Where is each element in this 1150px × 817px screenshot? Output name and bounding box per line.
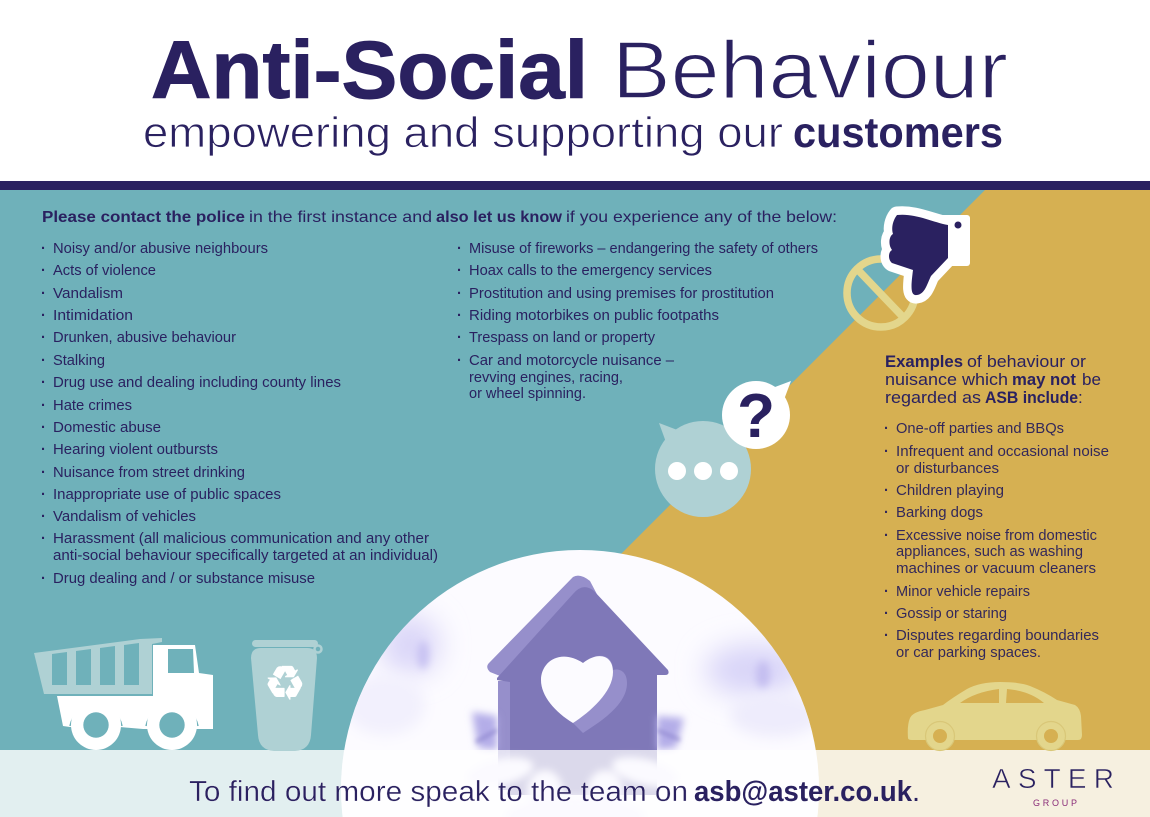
icon: thumbs down [889, 215, 970, 295]
list: ASB behaviours column 1: Hate crimes [53, 398, 132, 414]
list: ASB behaviours column 2: · [457, 286, 462, 302]
icon: speech bubble with dots [655, 421, 751, 517]
icon: recycling bin [251, 640, 322, 751]
list: ASB behaviours column 1: anti-social behaviour specifically targeted at an individual) [53, 548, 438, 564]
list: not ASB heading: may not [1012, 370, 1076, 389]
title: Behaviour [612, 25, 1008, 116]
panel: teal ASB background [0, 190, 1150, 750]
list: not ASB examples [884, 421, 1109, 661]
list: ASB behaviours column 1: · [41, 571, 46, 587]
navy header rule [0, 181, 1150, 190]
list: not ASB examples: Minor vehicle repairs [896, 584, 1030, 600]
list: ASB behaviours column 1: Noisy and/or abusive neighbours [53, 241, 268, 257]
list: not ASB examples: · [884, 421, 889, 437]
footer call to action [189, 776, 920, 808]
logo: Aster Group: ASTER [992, 763, 1114, 794]
list: not ASB heading [885, 352, 1101, 407]
list: ASB behaviours column 2: Hoax calls to the emergency services [469, 263, 712, 279]
list: not ASB examples: or car parking spaces. [896, 645, 1041, 661]
list: ASB behaviours column 1: Harassment (all malicious communication and any other [53, 531, 429, 547]
list: not ASB examples: Barking dogs [896, 505, 983, 521]
list: not ASB examples: machines or vacuum cleaners [896, 561, 1096, 577]
list: ASB behaviours column 2: · [457, 308, 462, 324]
list: not ASB examples: Children playing [896, 483, 1004, 499]
list: ASB behaviours column 1: · [41, 442, 46, 458]
list: ASB behaviours column 1: Acts of violence [53, 263, 156, 279]
list: not ASB examples: appliances, such as washing [896, 544, 1083, 560]
subtitle: empowering and supporting our [143, 109, 783, 157]
list: ASB behaviours column 1: · [41, 241, 46, 257]
list: not ASB heading: nuisance which [885, 370, 1008, 389]
list: not ASB examples: One-off parties and BBQs [896, 421, 1064, 437]
list: not ASB examples: · [884, 584, 889, 600]
list: not ASB examples: · [884, 528, 889, 544]
list: ASB behaviours column 1: Vandalism [53, 286, 123, 302]
list: ASB behaviours column 1: Drunken, abusive behaviour [53, 330, 236, 346]
logo: Aster Group [992, 763, 1114, 808]
list: ASB behaviours column 2: Riding motorbikes on public footpaths [469, 308, 719, 324]
footer call to action: . [912, 776, 920, 808]
list: not ASB heading: regarded as [885, 388, 981, 407]
panel: gold not-ASB background [425, 190, 1150, 750]
intro text [42, 209, 837, 226]
list: not ASB examples: · [884, 505, 889, 521]
list: ASB behaviours column 2: Car and motorcycle nuisance – [469, 353, 675, 369]
cupped hands [472, 712, 684, 750]
list: ASB behaviours column 1: · [41, 263, 46, 279]
soft background hands and arms [345, 615, 820, 737]
list: ASB behaviours column 1: Domestic abuse [53, 420, 161, 436]
list: ASB behaviours column 1: Nuisance from street drinking [53, 465, 245, 481]
list: ASB behaviours column 2: · [457, 241, 462, 257]
footer band [0, 750, 1150, 817]
list: ASB behaviours column 2: or wheel spinning. [469, 386, 586, 402]
list: not ASB examples: Gossip or staring [896, 606, 1007, 622]
list: ASB behaviours column 1: Inappropriate use of public spaces [53, 487, 281, 503]
footer call to action: asb@aster.co.uk [694, 776, 913, 808]
list: not ASB examples: · [884, 606, 889, 622]
intro text: in the first instance and [249, 209, 432, 226]
list: ASB behaviours column 1: Intimidation [53, 308, 133, 324]
list: ASB behaviours column 1: Drug use and dealing including county lines [53, 375, 341, 391]
list: not ASB examples: · [884, 444, 889, 460]
list: ASB behaviours column 1: · [41, 509, 46, 525]
list: not ASB heading: Examples [885, 352, 963, 371]
list: ASB behaviours column 1: Hearing violent outbursts [53, 442, 218, 458]
title [151, 25, 1008, 116]
list: not ASB examples: Disputes regarding boundaries [896, 628, 1099, 644]
list: ASB behaviours column 2: Trespass on land or property [469, 330, 656, 346]
intro text: also let us know [436, 209, 563, 226]
list: ASB behaviours column 1: · [41, 330, 46, 346]
list: not ASB examples: Excessive noise from domestic [896, 528, 1097, 544]
icon: car [908, 682, 1082, 750]
intro text: if you experience any of the below: [566, 209, 837, 226]
list: ASB behaviours column 1: · [41, 465, 46, 481]
logo: Aster Group: GROUP [1033, 798, 1077, 808]
footer call to action: To find out more speak to the team on [189, 776, 688, 808]
subtitle: customers [793, 109, 1003, 157]
list: ASB behaviours column 1: · [41, 487, 46, 503]
list: ASB behaviours column 1: · [41, 308, 46, 324]
list: not ASB examples: or disturbances [896, 461, 999, 477]
list: ASB behaviours column 2 [457, 241, 818, 402]
list: ASB behaviours column 2: · [457, 353, 462, 369]
intro text: Please contact the police [42, 209, 245, 226]
list: ASB behaviours column 1: · [41, 398, 46, 414]
header panel [0, 0, 1150, 181]
list: ASB behaviours column 2: · [457, 263, 462, 279]
list: ASB behaviours column 1: Stalking [53, 353, 105, 369]
wooden house [487, 576, 669, 795]
list: ASB behaviours column 2: revving engines, racing, [469, 370, 623, 386]
list: ASB behaviours column 1 [41, 241, 438, 587]
list: ASB behaviours column 1: · [41, 420, 46, 436]
icon: prohibition sign [847, 259, 915, 327]
icon: speech bubble with question mark: ? [737, 382, 775, 451]
list: not ASB heading: : [1078, 388, 1083, 407]
list: ASB behaviours column 2: Misuse of fireworks – endangering the safety of others [469, 241, 818, 257]
list: not ASB examples: · [884, 628, 889, 644]
icon: recycling bin: ♻ [264, 656, 306, 710]
list: ASB behaviours column 1: · [41, 353, 46, 369]
list: ASB behaviours column 1: Drug dealing and / or substance misuse [53, 571, 315, 587]
list: not ASB heading: ASB include [985, 388, 1078, 407]
list: ASB behaviours column 2: · [457, 330, 462, 346]
list: ASB behaviours column 1: · [41, 286, 46, 302]
title: Anti-Social [151, 25, 588, 116]
list: ASB behaviours column 2: Prostitution and using premises for prostitution [469, 286, 774, 302]
list: ASB behaviours column 1: Vandalism of vehicles [53, 509, 196, 525]
icon: speech bubble with question mark [722, 381, 791, 451]
list: not ASB heading: be [1082, 370, 1101, 389]
icon: dump truck [34, 638, 213, 750]
list: not ASB heading: of behaviour or [967, 352, 1086, 371]
list: not ASB examples: · [884, 483, 889, 499]
list: ASB behaviours column 1: · [41, 531, 46, 547]
fingers [498, 754, 657, 795]
list: ASB behaviours column 1: · [41, 375, 46, 391]
photo: hands holding wooden house [330, 540, 830, 817]
list: not ASB examples: Infrequent and occasional noise [896, 444, 1109, 460]
